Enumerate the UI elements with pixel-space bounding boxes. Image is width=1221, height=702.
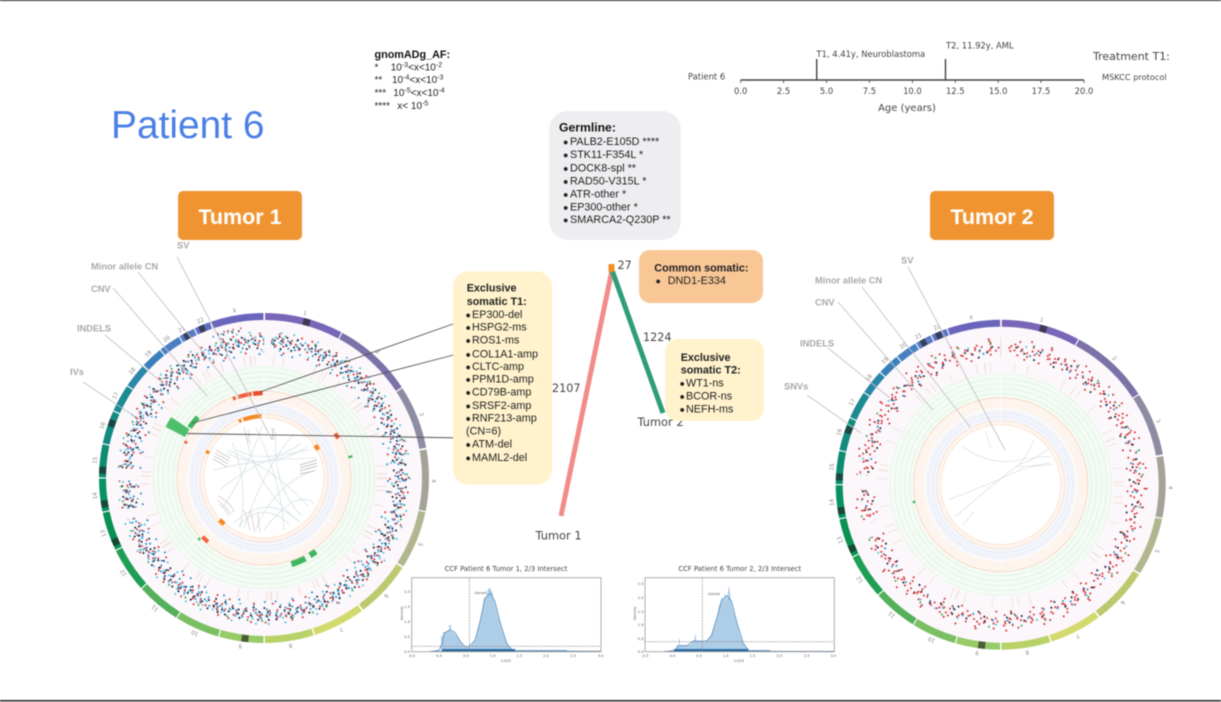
- timeline: patient age axis: T2, 11.92y, AML: [945, 40, 1014, 50]
- legend: gnomADg_AF: ***: [374, 88, 386, 99]
- chromosome numbers: 7: [337, 625, 344, 632]
- button: Tumor 2: [930, 191, 1054, 240]
- branch counts and tumor names: 2107: [552, 382, 580, 395]
- track labels: Tumor 2: SV: [901, 256, 914, 266]
- annotation and axes labels: Gonad: [708, 592, 720, 596]
- panel: Germline: RAD50-V315L *: [570, 175, 647, 187]
- panel: Germline: ●: [563, 176, 568, 186]
- chromosome numbers: 13: [100, 528, 108, 537]
- scatter track: SNV dots: [855, 339, 1147, 631]
- legend: gnomADg_AF: -3: [437, 74, 444, 82]
- timeline: patient age axis: 20.0: [1075, 86, 1093, 96]
- panel: Exclusive somatic T1: CLTC-amp: [472, 361, 524, 373]
- annotation and axes labels: 2.0: [404, 590, 411, 594]
- chromosome numbers: 11: [150, 603, 160, 612]
- panel: Common somatic: ●: [656, 276, 661, 286]
- frame: [412, 578, 601, 652]
- annotation and axes labels: [400, 590, 604, 663]
- chromosome numbers: 16: [836, 428, 844, 437]
- annotation and axes labels: 0.0: [404, 650, 411, 654]
- panel: Exclusive somatic T1: ●: [466, 453, 471, 463]
- timeline: patient age axis: 2.5: [777, 86, 790, 96]
- panel: Germline: ●: [563, 215, 568, 225]
- pale tick track: [883, 367, 1119, 603]
- panel: Exclusive somatic T1: ●: [466, 439, 471, 449]
- timeline: patient age axis: Patient 6: [688, 72, 725, 82]
- track labels: Tumor 1: SV: [177, 240, 190, 250]
- annotation and axes labels: t-023: [501, 659, 511, 663]
- annotation and axes labels: 0.5: [696, 654, 702, 658]
- track labels: Tumor 2: [784, 256, 1005, 450]
- chromosome numbers: 4: [430, 479, 436, 483]
- chromosome numbers: 3: [1154, 419, 1161, 425]
- panel: Exclusive somatic T2: BCOR-ns: [686, 391, 733, 403]
- track labels: Tumor 2: Minor allele CN: [815, 276, 882, 286]
- panel: Exclusive somatic T1: SRSF2-amp: [472, 400, 531, 412]
- sparse gaps in scatter track: [129, 343, 399, 613]
- chromosome boundaries: [916, 400, 1086, 570]
- annotation and axes labels: 2.5: [638, 582, 644, 586]
- annotation and axes labels: 0.0: [638, 650, 644, 654]
- band backgrounds and tracks: [106, 320, 422, 636]
- chromosome numbers: 14: [93, 491, 99, 500]
- chromosome numbers: 3: [417, 412, 424, 418]
- track labels: Tumor 1: INDELS: [77, 324, 111, 334]
- branch counts and tumor names: 1224: [643, 331, 671, 344]
- panel: Exclusive somatic T1: ●: [466, 349, 471, 359]
- button: Tumor 2: Tumor 2: [950, 205, 1034, 229]
- panel: Exclusive somatic T1: ATM-del: [472, 438, 512, 450]
- button: Tumor 1: [178, 191, 302, 240]
- panel: Germline: [549, 111, 681, 240]
- chromosome numbers: [93, 308, 436, 649]
- chromosome numbers: 12: [856, 575, 865, 584]
- panel: Germline: EP300-other *: [570, 201, 639, 213]
- chromosome numbers: 22: [196, 317, 205, 325]
- panel: Exclusive somatic T1: CD79B-amp: [472, 387, 531, 399]
- panel: Exclusive somatic T2: ●: [680, 378, 685, 388]
- title: Patient 6: Patient 6: [111, 104, 265, 147]
- chromosome numbers: 8: [1024, 648, 1029, 655]
- panel: Germline: ●: [563, 137, 568, 147]
- annotation and axes labels: 0.5: [638, 637, 644, 641]
- chromosome numbers: 4: [1167, 486, 1173, 490]
- chromosome numbers: 20: [899, 342, 909, 351]
- panel: Exclusive somatic T1: ●: [466, 401, 471, 411]
- branch: Tumor 2: [612, 270, 663, 413]
- timeline: patient age axis: T1, 4.41y, Neuroblastoma: [816, 49, 925, 59]
- panel: Exclusive somatic T1: Exclusive: [467, 283, 517, 295]
- timeline: patient age axis: Age (years): [878, 103, 936, 114]
- legend: gnomADg_AF: 10: [392, 75, 403, 86]
- panel: Exclusive somatic T1: ●: [466, 388, 471, 398]
- panel: Exclusive somatic T1: somatic T1:: [467, 296, 527, 308]
- panel: Exclusive somatic T2: WT1-ns: [686, 377, 724, 389]
- legend: gnomADg_AF: 10: [391, 62, 402, 74]
- panel: Exclusive somatic T1: COL1A1-amp: [472, 348, 538, 360]
- branch counts and tumor names: 27: [618, 259, 632, 272]
- timeline: patient age axis: 12.5: [946, 86, 965, 96]
- legend: gnomADg_AF: <x<10: [409, 75, 438, 86]
- branch: Tumor 1: [561, 270, 612, 516]
- timeline: patient age axis: 7.5: [863, 86, 876, 96]
- annotation and axes labels: 1.0: [490, 654, 496, 658]
- timeline: patient age axis: 10.0: [903, 86, 922, 96]
- annotation and axes labels: 0.0: [436, 654, 443, 658]
- annotation and axes labels: 1.5: [516, 654, 522, 658]
- panel: Exclusive somatic T1: PPM1D-amp: [472, 374, 534, 386]
- sparse gaps in scatter track: [865, 349, 1137, 621]
- panel: Exclusive somatic T2: ●: [680, 392, 685, 402]
- track labels: Tumor 2: CNV: [815, 298, 835, 308]
- panel: Exclusive somatic T1: ●: [466, 414, 471, 424]
- panel: Germline: ●: [563, 189, 568, 199]
- panel: Exclusive somatic T1: RNF213-amp: [472, 413, 537, 425]
- density curve: [667, 596, 834, 652]
- chromosome numbers: 15: [829, 463, 836, 471]
- chromosome numbers: 11: [887, 609, 897, 619]
- annotation and axes labels: 1.5: [749, 654, 755, 658]
- chromosome numbers: 2: [374, 349, 380, 356]
- annotation and axes labels: 0.5: [463, 654, 469, 658]
- chromosome numbers: X: [232, 308, 237, 315]
- panel: Exclusive somatic T2: [665, 339, 764, 421]
- chromosome boundaries: [179, 393, 349, 563]
- chromosome numbers: 10: [927, 635, 936, 643]
- histogram: [675, 585, 834, 652]
- panel: Exclusive somatic T2: NEFH-ms: [686, 404, 734, 416]
- chromosome numbers: 12: [119, 568, 128, 577]
- chromosome numbers: 16: [99, 421, 107, 430]
- chromosome X cluster: [112, 326, 416, 630]
- chart: CCF Patient 6 Tumor 2: [633, 565, 837, 663]
- chromosome numbers: 22: [933, 324, 942, 332]
- legend: gnomADg_AF: -4: [438, 88, 445, 94]
- panel: Exclusive somatic T2: ●: [680, 405, 685, 415]
- chromosome numbers: 8: [288, 642, 293, 648]
- chromosome numbers: 6: [382, 592, 389, 599]
- annotation and axes labels: 0.0: [669, 654, 676, 658]
- annotation and axes labels: 1.0: [723, 654, 729, 658]
- annotation and axes labels: 1.5: [404, 605, 410, 609]
- timeline: patient age axis: 17.5: [1032, 86, 1050, 96]
- chromosome numbers: 1: [302, 311, 308, 317]
- panel: Common somatic: [639, 250, 763, 303]
- timeline: patient age axis: [688, 40, 1170, 114]
- legend: gnomADg_AF: [374, 49, 450, 112]
- annotation and axes labels: 0.5: [404, 635, 410, 639]
- panel: Exclusive somatic T1: ROS1-ms: [472, 335, 520, 347]
- band backgrounds and tracks: [843, 327, 1159, 643]
- chromosome ring: [839, 323, 1162, 646]
- chromosome numbers: 21: [177, 326, 187, 335]
- annotation and axes labels: 2.0: [776, 654, 783, 658]
- structural variant chords: [213, 426, 317, 533]
- chromosome numbers: 19: [881, 356, 890, 366]
- annotation and axes labels: 1.0: [404, 620, 411, 624]
- annotation and axes labels: 3.0: [830, 654, 837, 658]
- annotation and axes labels: Density: [633, 605, 637, 620]
- track labels: Tumor 2: SNVs: [784, 382, 808, 392]
- chromosome numbers: 21: [914, 332, 924, 341]
- panel: Common somatic: DND1-E334: [668, 275, 726, 287]
- panel: Common somatic: Common somatic:: [654, 262, 748, 274]
- chromosome numbers: 17: [112, 391, 121, 401]
- chromosome numbers: 2: [1110, 356, 1117, 363]
- panel: Germline: ATR-other *: [570, 188, 627, 200]
- button: Tumor 1: Tumor 1: [198, 205, 282, 229]
- small green CNV mark: [913, 501, 915, 503]
- legend: gnomADg_AF: ****: [374, 101, 390, 112]
- legend: gnomADg_AF: 10: [393, 88, 404, 99]
- panel: Exclusive somatic T2: somatic T2:: [681, 364, 741, 376]
- panel: Exclusive somatic T1: [453, 272, 552, 484]
- histogram: [441, 588, 601, 652]
- panel: Exclusive somatic T1: (CN=6): [466, 426, 501, 438]
- panel: Exclusive somatic T1: ●: [466, 323, 471, 333]
- threshold lines: [645, 578, 834, 652]
- threshold lines: [412, 578, 601, 652]
- panel: Exclusive somatic T1: ●: [466, 362, 471, 372]
- chromosome numbers: 5: [1153, 548, 1160, 554]
- rug: [664, 649, 834, 652]
- annotation and axes labels: -0.5: [641, 654, 649, 658]
- chromosome numbers: 19: [144, 349, 154, 359]
- panel: Germline: SMARCA2-Q230P **: [570, 214, 671, 226]
- legend: gnomADg_AF: gnomADg_AF:: [374, 49, 450, 61]
- panel: Germline: PALB2-E105D ****: [570, 136, 660, 148]
- annotation and axes labels: -0.5: [408, 654, 415, 658]
- chart: CCF Patient 6 Tumor 1: CCF Patient 6 Tumor 1, 2/3 Intersect: [445, 565, 568, 573]
- legend: gnomADg_AF: <x<10: [408, 62, 436, 74]
- branch counts and tumor names: Tumor 2: [636, 415, 684, 429]
- rug: [430, 649, 601, 652]
- timeline: patient age axis: 15.0: [989, 86, 1008, 96]
- legend: gnomADg_AF: *: [374, 62, 378, 74]
- chromosome numbers: 18: [865, 373, 874, 383]
- legend: gnomADg_AF: -3: [402, 62, 408, 69]
- branch counts and tumor names: [534, 259, 684, 542]
- chromosome numbers: 6: [1119, 599, 1126, 606]
- annotation and axes labels: t-023: [734, 659, 744, 663]
- legend: gnomADg_AF: <x<10: [411, 88, 439, 99]
- density curve: [432, 593, 601, 652]
- panel: Germline: Germline:: [559, 120, 616, 134]
- legend: gnomADg_AF: -5: [422, 100, 428, 108]
- panel: Germline: ●: [563, 163, 568, 173]
- track labels: Tumor 1: [70, 240, 272, 440]
- annotation and axes labels: 2.0: [638, 596, 644, 600]
- annotation and axes labels: Density: [400, 605, 404, 620]
- connector lines: Tumor 1 genes to plot: [187, 318, 470, 438]
- chromosome numbers: X: [969, 315, 974, 322]
- annotation and axes labels: 2.5: [570, 654, 576, 658]
- chromosome ring: [102, 316, 426, 640]
- chromosome numbers: 20: [162, 335, 172, 344]
- annotation and axes labels: 2.5: [804, 654, 810, 658]
- frame: [645, 578, 834, 652]
- annotation and axes labels: 1.5: [638, 610, 644, 614]
- timeline: patient age axis: 0.0: [734, 86, 747, 96]
- annotation and axes labels: Gonad: [474, 591, 486, 595]
- panel: Exclusive somatic T2: Exclusive: [681, 352, 731, 364]
- legend: gnomADg_AF: -4: [403, 74, 409, 82]
- chromosome numbers: 13: [837, 535, 845, 544]
- branch: trunk: [608, 264, 614, 272]
- timeline: patient age axis: Treatment T1:: [1092, 50, 1170, 63]
- timeline: patient age axis: 5.0: [820, 86, 833, 96]
- annotation and axes labels: 2.0: [543, 654, 550, 658]
- chromosome numbers: 17: [849, 398, 857, 407]
- track labels: Tumor 1: Minor allele CN: [91, 262, 158, 272]
- panel: Exclusive somatic T1: HSPG2-ms: [472, 322, 527, 334]
- panel: Exclusive somatic T1: ●: [466, 336, 471, 346]
- structural variant chords: [949, 432, 1053, 525]
- track labels: Tumor 2: INDELS: [800, 338, 834, 348]
- chromosome numbers: [829, 315, 1173, 655]
- panel: Germline: DOCK8-spl **: [570, 162, 637, 174]
- legend: gnomADg_AF: x< 10: [397, 101, 422, 112]
- panel: Exclusive somatic T1: ●: [466, 310, 471, 320]
- phylogenetic tree: [534, 259, 684, 542]
- chart: CCF Patient 6 Tumor 2: CCF Patient 6 Tumor 2, 2/3 Intersect: [678, 565, 801, 573]
- chromosome numbers: 9: [975, 649, 979, 655]
- pale tick track: [146, 360, 382, 596]
- chromosome numbers: 9: [238, 642, 243, 649]
- chart: CCF Patient 6 Tumor 1: [400, 565, 604, 663]
- annotation and axes labels: [633, 582, 837, 663]
- annotation and axes labels: 3.0: [598, 654, 604, 658]
- timeline: patient age axis: MSKCC protocol: [1102, 72, 1167, 82]
- scatter track: SNV and IV dots: [118, 332, 410, 624]
- panel: Germline: STK11-F354L *: [570, 149, 644, 161]
- panel: Germline: ●: [563, 202, 568, 212]
- chromosome numbers: 5: [416, 541, 423, 547]
- circos plot: Tumor 1: [93, 308, 436, 649]
- track labels: Tumor 1: CNV: [91, 284, 111, 294]
- legend: gnomADg_AF: -5: [404, 88, 411, 94]
- panel: Exclusive somatic T1: ●: [466, 375, 471, 385]
- chromosome numbers: 18: [128, 367, 138, 376]
- panel: Exclusive somatic T1: MAML2-del: [472, 452, 527, 464]
- panel: Exclusive somatic T1: EP300-del: [472, 309, 522, 321]
- chromosome numbers: 14: [829, 498, 836, 506]
- circos plot: Tumor 2: [829, 315, 1173, 655]
- chromosome numbers: 10: [190, 628, 200, 637]
- chromosome numbers: 15: [93, 456, 99, 464]
- branch counts and tumor names: Tumor 1: [534, 528, 582, 542]
- annotation and axes labels: 1.0: [638, 623, 644, 627]
- track labels: Tumor 1: IVs: [70, 367, 84, 377]
- legend: gnomADg_AF: **: [374, 75, 382, 86]
- legend: gnomADg_AF: -2: [436, 62, 442, 69]
- panel: Germline: ●: [563, 150, 568, 160]
- chromosome numbers: 7: [1074, 632, 1080, 639]
- CNV and minor allele highlighted segments: [164, 378, 364, 578]
- chromosome numbers: 1: [1039, 317, 1044, 324]
